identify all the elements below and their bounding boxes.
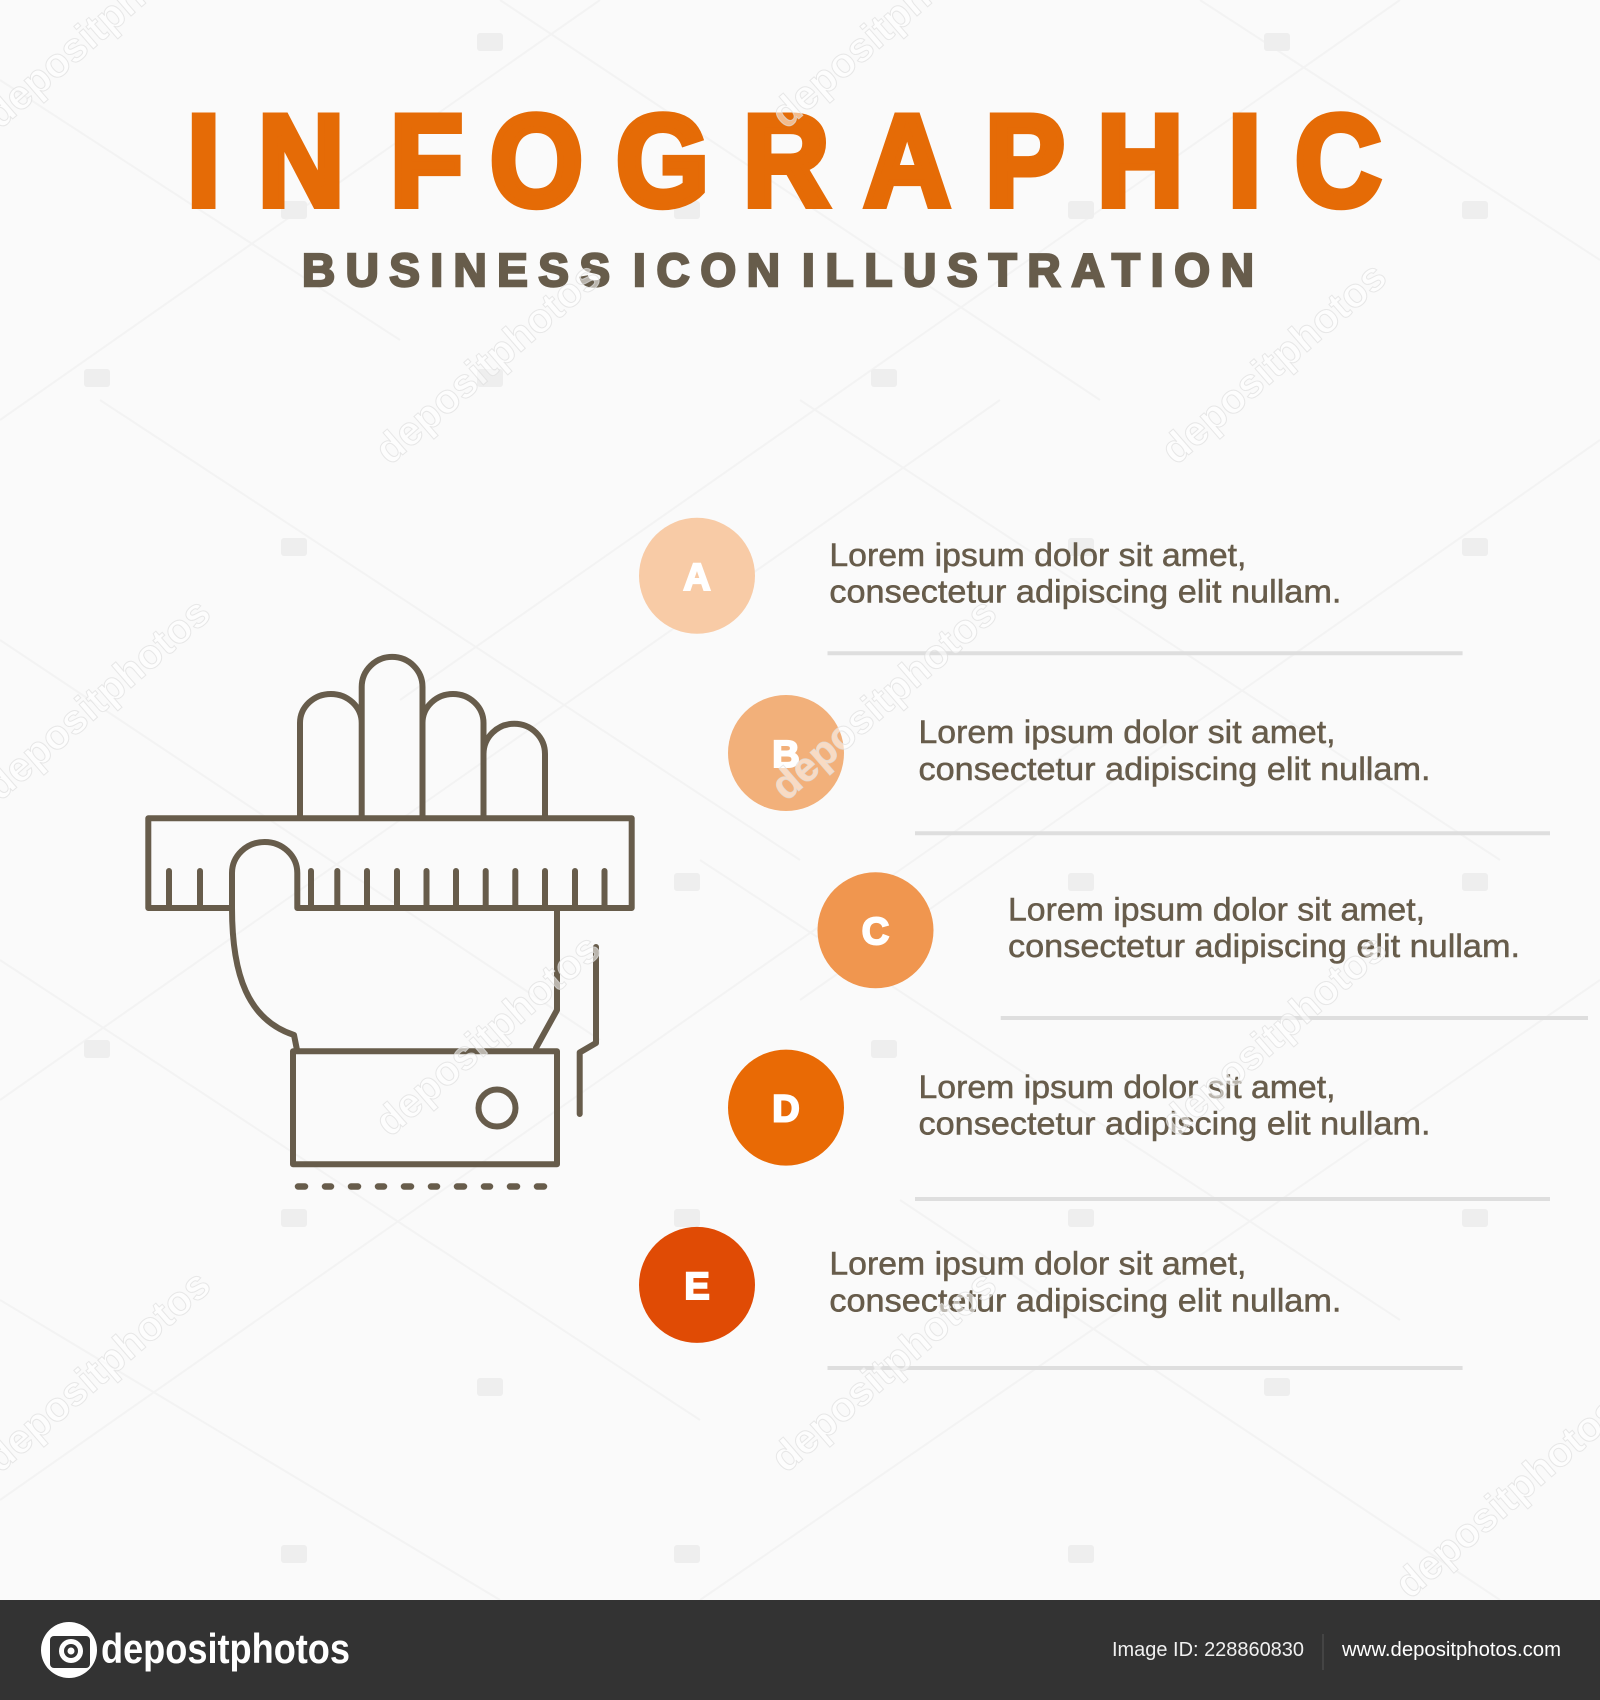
footer logo text: depositphotos	[101, 1625, 350, 1672]
title: INFOGRAPHIC	[187, 89, 1381, 234]
fingers	[300, 657, 545, 818]
motion line	[580, 947, 596, 1114]
letter A: A	[683, 557, 711, 599]
circle E	[639, 1227, 755, 1343]
text B: Lorem ipsum dolor sit amet,	[918, 714, 1336, 750]
letter B: B	[772, 734, 800, 776]
circle A	[639, 518, 755, 634]
text: depositphotos	[1152, 925, 1395, 1145]
letter E: E	[684, 1266, 710, 1308]
text: depositphotos	[366, 925, 609, 1145]
letter C: C	[862, 911, 889, 953]
text D: Lorem ipsum dolor sit amet,	[918, 1069, 1336, 1105]
dotted shadow	[298, 1183, 544, 1190]
footer bar	[0, 1600, 1600, 1700]
text C: Lorem ipsum dolor sit amet,	[1008, 892, 1425, 928]
circle D	[728, 1050, 844, 1166]
step B	[728, 695, 1550, 833]
ruler ticks	[169, 871, 604, 908]
text: depositphotos	[366, 253, 609, 473]
step A: consectetur adipiscing elit nullam.	[829, 574, 1341, 610]
icon: hand holding ruler	[148, 657, 632, 1186]
step D: consectetur adipiscing elit nullam.	[918, 1106, 1430, 1142]
text E: Lorem ipsum dolor sit amet,	[829, 1246, 1246, 1282]
text: depositphotos	[762, 1261, 1005, 1481]
step C	[818, 872, 1588, 1018]
ruler outline with thumb	[148, 818, 632, 908]
footer logo icon	[41, 1622, 97, 1678]
circle B	[728, 695, 844, 811]
circle C	[818, 872, 934, 988]
subtitle: BUSINESS	[302, 244, 610, 296]
subtitle	[302, 244, 1254, 296]
image id: Image ID: 228860830	[1112, 1639, 1304, 1661]
letter D: D	[772, 1088, 800, 1130]
cuff	[293, 1051, 557, 1164]
step C: consectetur adipiscing elit nullam.	[1008, 928, 1520, 964]
text: depositphotos	[1152, 253, 1395, 473]
subtitle: ICON	[633, 244, 780, 296]
step E	[639, 1227, 1463, 1368]
subtitle: ILLUSTRATION	[802, 244, 1254, 296]
step B: consectetur adipiscing elit nullam.	[918, 751, 1430, 787]
text A: Lorem ipsum dolor sit amet,	[829, 537, 1246, 573]
cuff button	[478, 1090, 516, 1126]
step A	[639, 518, 1463, 653]
step D	[728, 1050, 1550, 1199]
website url: www.depositphotos.com	[1341, 1639, 1561, 1661]
hand outline	[232, 908, 557, 1050]
step E: consectetur adipiscing elit nullam.	[829, 1282, 1341, 1318]
text: depositphotos	[762, 589, 1005, 809]
